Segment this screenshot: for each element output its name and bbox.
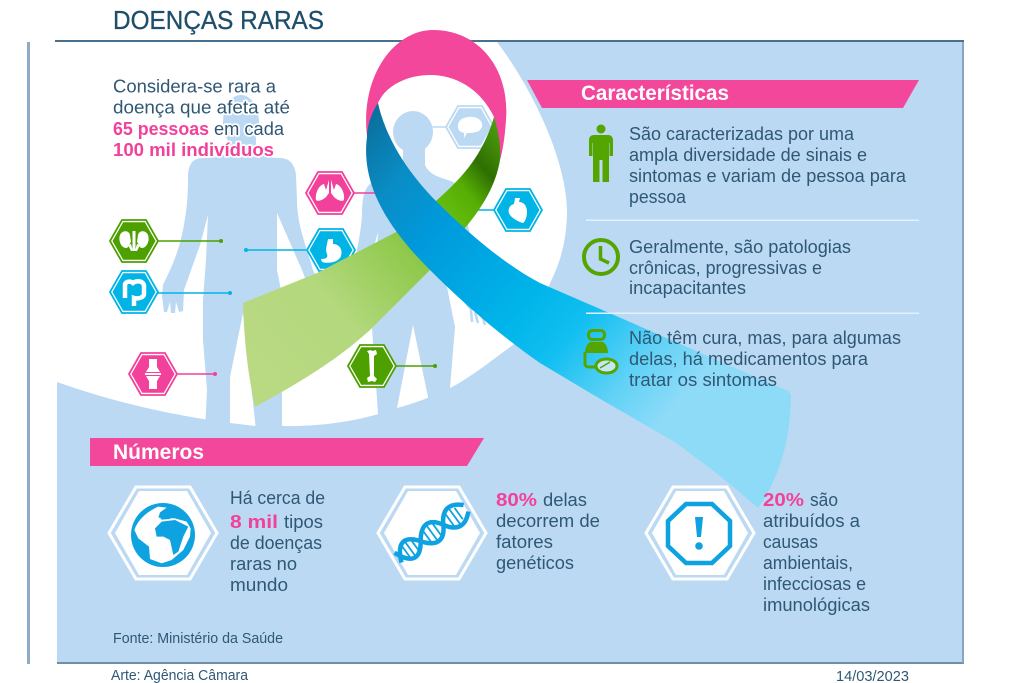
- icon: clock: [584, 240, 618, 274]
- text: characteristic 1: [629, 124, 907, 207]
- icon: intestine hexagon: [110, 271, 232, 313]
- text: characteristic 1: pessoa: [629, 187, 687, 207]
- divider lines: [586, 220, 919, 314]
- text: characteristic 1: sintomas e variam de pessoa para: [629, 166, 907, 186]
- title: DOENÇAS RARAS: [113, 5, 324, 35]
- text: characteristic 2: [629, 237, 851, 298]
- text: characteristic 3: tratar os sintomas: [629, 370, 777, 390]
- icon: kidneys hexagon: [110, 220, 223, 262]
- text: stat 80%: fatores: [496, 532, 553, 552]
- text: stat 20%: atribuídos a: [763, 511, 861, 531]
- icon: stomach hexagon: [244, 229, 355, 271]
- text: stat 80%: genéticos: [496, 553, 574, 573]
- text: stat 8 mil: [230, 488, 325, 595]
- text: stat 80%: 80%: [496, 489, 537, 510]
- icon: brain hexagon: [432, 106, 494, 148]
- text: stat 8 mil: Há cerca de: [230, 488, 325, 508]
- text: intro: doença que afeta até: [113, 98, 290, 118]
- text: characteristic 2: Geralmente, são patologias: [629, 237, 851, 257]
- icon: lungs hexagon: [306, 172, 380, 214]
- text: stat 20%: infecciosas e: [763, 574, 866, 594]
- text: stat 8 mil: 8 mil: [230, 511, 278, 532]
- banner: números: Números: [113, 441, 204, 464]
- icon: joint hexagon: [129, 353, 217, 395]
- text: intro: Considera-se rara a: [113, 76, 277, 96]
- text: characteristic 3: [629, 328, 901, 390]
- text: characteristic 1: ampla diversidade de sinais e: [629, 145, 867, 165]
- text: characteristic 3: delas, há medicamentos para: [629, 349, 869, 369]
- text: stat 8 mil: tipos: [284, 512, 323, 532]
- text: intro: em cada: [214, 119, 285, 139]
- icon: medicine: [585, 330, 617, 373]
- banner: características: Características: [581, 82, 729, 105]
- banner: características: [527, 80, 919, 108]
- icon: person: [589, 124, 613, 182]
- text: stat 20%: imunológicas: [763, 595, 870, 615]
- ribbon: [243, 30, 791, 508]
- text: stat 80%: [496, 489, 600, 573]
- icon: globe in hexagon: [109, 487, 217, 579]
- text: stat 20%: causas: [763, 532, 818, 552]
- text: characteristic 1: São caracterizadas por uma: [629, 124, 855, 144]
- illustration: human body left: [162, 95, 330, 430]
- text: intro: [113, 76, 290, 160]
- text: stat 20%: ambientais,: [763, 553, 853, 573]
- text: stat 20%: 20%: [763, 489, 804, 510]
- icon: heart hexagon: [478, 189, 542, 231]
- text: stat 80%: delas: [543, 490, 587, 510]
- text: intro: 65 pessoas: [113, 118, 209, 139]
- text: characteristic 3: Não têm cura, mas, para algumas: [629, 328, 901, 348]
- text: stat 20%: [763, 489, 870, 615]
- text: intro: 100 mil indivíduos: [113, 139, 274, 160]
- banner: números: [90, 438, 484, 466]
- text: stat 8 mil: mundo: [230, 575, 288, 595]
- icon: bone hexagon: [348, 345, 437, 387]
- source note: Fonte: Ministério da Saúde: [113, 631, 283, 647]
- text: characteristic 2: incapacitantes: [629, 278, 746, 298]
- icon: DNA in hexagon: [378, 487, 486, 579]
- icon: warning in hexagon: [646, 487, 754, 579]
- illustration: human body right: [348, 111, 485, 430]
- text: stat 80%: decorrem de: [496, 511, 600, 531]
- text: characteristic 2: crônicas, progressivas e: [629, 258, 822, 278]
- text: stat 8 mil: raras no: [230, 554, 297, 574]
- text: stat 8 mil: de doenças: [230, 533, 322, 553]
- text: stat 20%: são: [810, 490, 838, 510]
